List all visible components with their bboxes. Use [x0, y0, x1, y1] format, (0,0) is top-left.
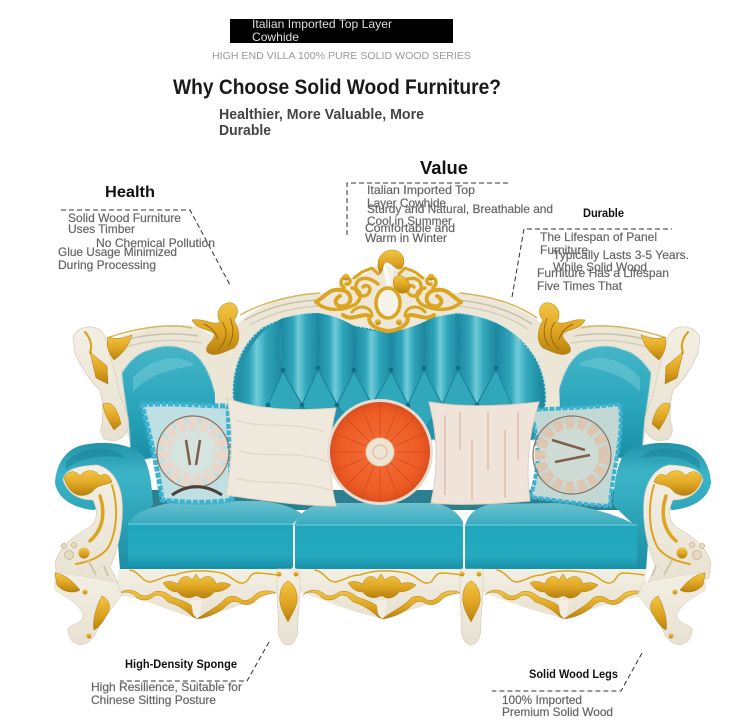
callout: durable — [512, 206, 689, 297]
callout: solid wood legs: 100% Imported — [502, 693, 582, 707]
callout: health: Uses Timber — [68, 222, 135, 236]
title: Why Choose Solid Wood Furniture? — [173, 76, 501, 99]
left arm — [55, 443, 153, 598]
rail ornament: right — [485, 570, 644, 619]
callout: health: During Processing — [58, 258, 156, 272]
base rail — [118, 569, 646, 618]
callout: value: Layer Cowhide — [367, 196, 446, 210]
pillow: white left — [226, 398, 336, 506]
pillow: left floral — [142, 404, 232, 502]
header banner: Cowhide — [252, 30, 299, 44]
callout: high-density sponge: High-Density Sponge — [125, 657, 237, 671]
callout: health: Health — [105, 184, 155, 201]
right arm — [613, 443, 711, 598]
callout: high-density sponge: Chinese Sitting Posture — [91, 693, 216, 707]
back frame — [215, 293, 560, 420]
callout: durable: Furniture Has a Lifespan — [537, 266, 669, 280]
rail ornament: centre — [303, 570, 462, 619]
callout: value — [347, 158, 553, 245]
series subtitle: HIGH END VILLA 100% PURE SOLID WOOD SERIES — [212, 51, 471, 62]
pillow: right floral — [530, 404, 621, 506]
callout: health: Glue Usage Minimized — [58, 245, 177, 259]
subheading — [219, 106, 424, 139]
callout: durable: Durable — [583, 206, 624, 220]
pillow: white right — [429, 402, 539, 504]
right wing — [533, 325, 700, 462]
callout: health: No Chemical Pollution — [96, 236, 215, 250]
header banner: Italian Imported Top Layer — [252, 17, 392, 31]
callout: high-density sponge: High Resilience, Suitable for — [91, 680, 242, 694]
subheading: Durable — [219, 122, 271, 139]
callout: solid wood legs: Premium Solid Wood — [502, 705, 613, 719]
pillow: orange round — [327, 399, 433, 505]
acanthus ornament: right — [538, 303, 585, 355]
foot: right — [638, 560, 705, 645]
tufted back — [233, 313, 546, 440]
left wing — [73, 325, 240, 462]
dark gap behind seats — [150, 490, 620, 510]
callout: high-density sponge — [91, 642, 269, 707]
rail ornament: left — [118, 570, 277, 619]
leg: left — [276, 569, 300, 645]
foot: left — [55, 560, 122, 645]
callout: durable: The Lifespan of Panel — [540, 230, 657, 244]
callout: value: Sturdy and Natural, Breathable and — [367, 202, 553, 216]
callout: solid wood legs — [492, 653, 642, 719]
header banner — [230, 17, 453, 44]
seat cushions — [128, 501, 637, 570]
callout: value: Cool in Summer — [367, 214, 452, 228]
callout: value: Italian Imported Top — [367, 183, 475, 197]
callout: durable: While Solid Wood — [553, 260, 647, 274]
callout: solid wood legs: Solid Wood Legs — [529, 667, 618, 681]
leg: right — [460, 569, 483, 645]
callout: value: Warm in Winter — [365, 231, 447, 245]
callout: value: Value — [420, 158, 468, 178]
callout: durable: Typically Lasts 3-5 Years. — [553, 248, 689, 262]
sofa — [55, 250, 711, 645]
callout: durable: Five Times That — [537, 279, 623, 293]
acanthus ornament: left — [192, 303, 239, 355]
callout: durable: Furniture — [540, 243, 588, 257]
callout: health — [58, 184, 230, 285]
callout: value: Comfortable and — [365, 221, 455, 235]
crown ornament — [315, 250, 462, 332]
subheading: Healthier, More Valuable, More — [219, 106, 424, 123]
callout: health: Solid Wood Furniture — [68, 211, 181, 225]
